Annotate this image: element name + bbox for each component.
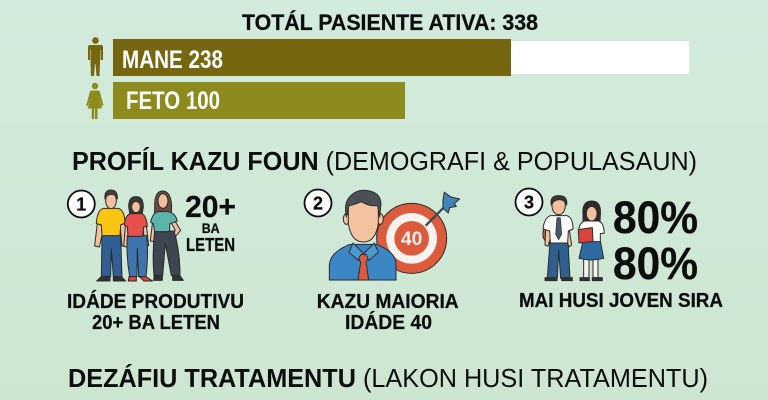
- stat: 20+ years: BA: [202, 220, 220, 236]
- boy: [547, 242, 570, 278]
- icon: male figure: [88, 37, 103, 76]
- stat: 20+ years: 20+: [185, 189, 236, 224]
- badge 2: [304, 190, 332, 216]
- label: productive age: [67, 290, 244, 334]
- target: [377, 203, 447, 273]
- badge 1: [68, 190, 95, 218]
- bar: male 238: [113, 39, 511, 76]
- panel: mostly youth: [516, 188, 723, 312]
- woman right: [155, 191, 172, 214]
- label: most cases age 40: IDÁDE 40: [345, 311, 432, 334]
- woman middle: [129, 197, 143, 213]
- panel: productive age: [67, 189, 244, 334]
- person: [329, 244, 396, 280]
- heading: treatment challenges: DEZÁFIU TRATAMENTU (LAKON HUSI TRATAMENTU): [68, 363, 708, 393]
- icon: female figure: [86, 83, 104, 119]
- heading: new case profile: PROFÍL KAZU FOUN (DEMOGRAFI & POPULASAUN): [72, 146, 697, 176]
- backpack: [543, 218, 554, 243]
- badge 1: 1: [76, 194, 86, 214]
- label: most cases age 40: KAZU MAIORIA: [317, 291, 459, 313]
- icon: two students: [543, 196, 604, 281]
- panel: most cases at age 40: [304, 190, 460, 334]
- stat: 20+ years: LETEN: [186, 235, 235, 255]
- label: mostly youth: MAI HUSI JOVEN SIRA: [519, 290, 723, 312]
- label: most cases age 40: [317, 291, 459, 334]
- man left: [95, 223, 126, 247]
- label: productive age: IDÁDE PRODUTIVU: [67, 290, 244, 313]
- girl: [583, 201, 600, 228]
- bar: male 238: MANE 238: [122, 46, 223, 74]
- stat: 80% repeated: 80%: [613, 238, 698, 289]
- stat: 20+ years: [185, 189, 236, 255]
- label: productive age: 20+ BA LETEN: [92, 312, 220, 334]
- stat: 80%: 80%: [613, 192, 698, 243]
- icon: man with target 40: 40: [401, 229, 422, 250]
- icon: man with target 40: [329, 190, 460, 280]
- badge 2: 2: [313, 194, 323, 214]
- bar chart: patients by sex: [86, 37, 689, 119]
- bar: female 100: [113, 82, 405, 119]
- badge 3: 3: [524, 192, 534, 212]
- icon: three adults: [95, 190, 183, 281]
- badge 3: [516, 188, 542, 216]
- bar: female 100: FETO 100: [126, 87, 220, 115]
- arrow: [426, 206, 445, 226]
- bar track: [113, 41, 689, 74]
- title: total active patients: TOTÁL PASIENTE ATIVA: 338: [242, 10, 538, 35]
